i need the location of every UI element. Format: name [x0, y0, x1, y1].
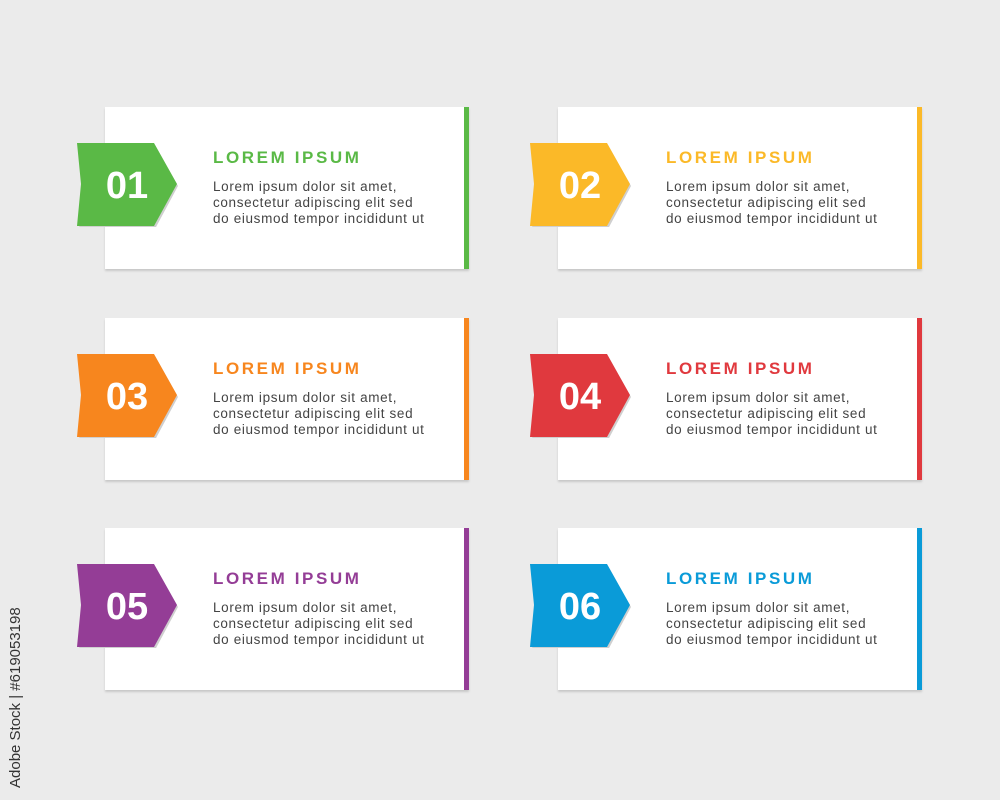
number arrow 05: 05 [106, 586, 148, 628]
text: Lorem ipsum dolor sit amet, [213, 390, 397, 405]
text [666, 600, 878, 647]
card 01 [105, 107, 469, 269]
text: Lorem ipsum dolor sit amet, [666, 179, 850, 194]
heading: LOREM IPSUM [213, 148, 362, 167]
heading: LOREM IPSUM [666, 569, 815, 588]
text: consectetur adipiscing elit sed [213, 195, 413, 210]
text [213, 390, 425, 437]
side watermark id: Adobe Stock | #619053198 [7, 607, 24, 788]
number arrow 05 [77, 564, 178, 648]
number arrow 02: 02 [559, 165, 601, 207]
number arrow 01 [77, 143, 178, 227]
text: Lorem ipsum dolor sit amet, [213, 600, 397, 615]
text [666, 390, 878, 437]
number arrow 06 [530, 564, 631, 648]
text: do eiusmod tempor incididunt ut [666, 422, 878, 437]
text: consectetur adipiscing elit sed [666, 195, 866, 210]
number arrow 01: 01 [106, 165, 148, 207]
accent bar [917, 318, 922, 480]
text: do eiusmod tempor incididunt ut [213, 422, 425, 437]
text: consectetur adipiscing elit sed [666, 616, 866, 631]
number arrow 04: 04 [559, 376, 601, 418]
accent bar [464, 107, 469, 269]
text [213, 600, 425, 647]
text: consectetur adipiscing elit sed [666, 406, 866, 421]
card 06 [558, 528, 922, 690]
text: do eiusmod tempor incididunt ut [213, 211, 425, 226]
heading: LOREM IPSUM [213, 359, 362, 378]
accent bar [464, 528, 469, 690]
accent bar [464, 318, 469, 480]
heading: LOREM IPSUM [666, 359, 815, 378]
card 03 [105, 318, 469, 480]
number arrow 03: 03 [106, 376, 148, 418]
text: Lorem ipsum dolor sit amet, [666, 600, 850, 615]
number arrow 06: 06 [559, 586, 601, 628]
heading: LOREM IPSUM [213, 569, 362, 588]
number arrow 04 [530, 354, 631, 438]
heading: LOREM IPSUM [666, 148, 815, 167]
text [213, 179, 425, 226]
accent bar [917, 528, 922, 690]
card 04 [558, 318, 922, 480]
card 05 [105, 528, 469, 690]
number arrow 02 [530, 143, 631, 227]
text: consectetur adipiscing elit sed [213, 406, 413, 421]
text: Lorem ipsum dolor sit amet, [213, 179, 397, 194]
text: consectetur adipiscing elit sed [213, 616, 413, 631]
text: do eiusmod tempor incididunt ut [666, 211, 878, 226]
text: do eiusmod tempor incididunt ut [213, 632, 425, 647]
text: do eiusmod tempor incididunt ut [666, 632, 878, 647]
text [666, 179, 878, 226]
text: Lorem ipsum dolor sit amet, [666, 390, 850, 405]
accent bar [917, 107, 922, 269]
card 02 [558, 107, 922, 269]
number arrow 03 [77, 354, 178, 438]
